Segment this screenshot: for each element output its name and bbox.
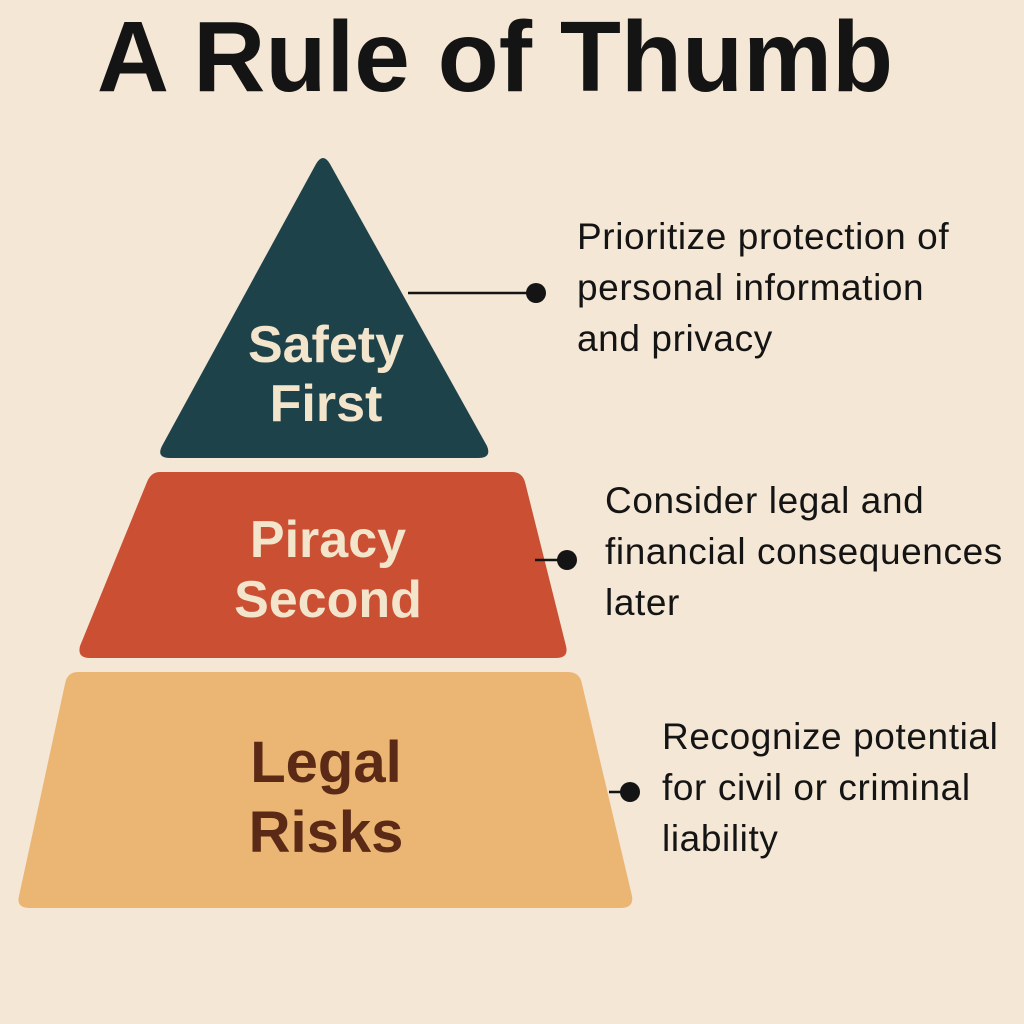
text block: legal description: Recognize potential [662,716,998,757]
pyramid tier: legal risks [18,672,632,908]
connector: safety [408,283,546,303]
pyramid tier: safety first: Safety [248,316,404,374]
pyramid tier: piracy second: Second [234,571,422,629]
connector: piracy [535,550,577,570]
pyramid tier: piracy second [79,472,567,658]
connector: legal [609,782,640,802]
pyramid tier: safety first [160,158,488,458]
pyramid tier: piracy second: Piracy [250,511,406,569]
text block: legal description: liability [662,818,778,859]
text block: legal description [662,716,998,859]
text block: safety description: personal information [577,267,924,308]
title: A Rule of Thumb [97,1,893,113]
text block: piracy description: financial consequences [605,531,1003,572]
text block: piracy description: later [605,582,680,623]
pyramid tier: legal risks: Risks [249,800,403,865]
pyramid tier: safety first: First [270,375,382,433]
pyramid tier: legal risks: Legal [250,730,402,795]
text block: safety description: and privacy [577,318,773,359]
text block: piracy description: Consider legal and [605,480,924,521]
text block: legal description: for civil or criminal [662,767,971,808]
text block: piracy description [605,480,1003,623]
text block: safety description: Prioritize protection of [577,216,949,257]
text block: safety description [577,216,949,359]
